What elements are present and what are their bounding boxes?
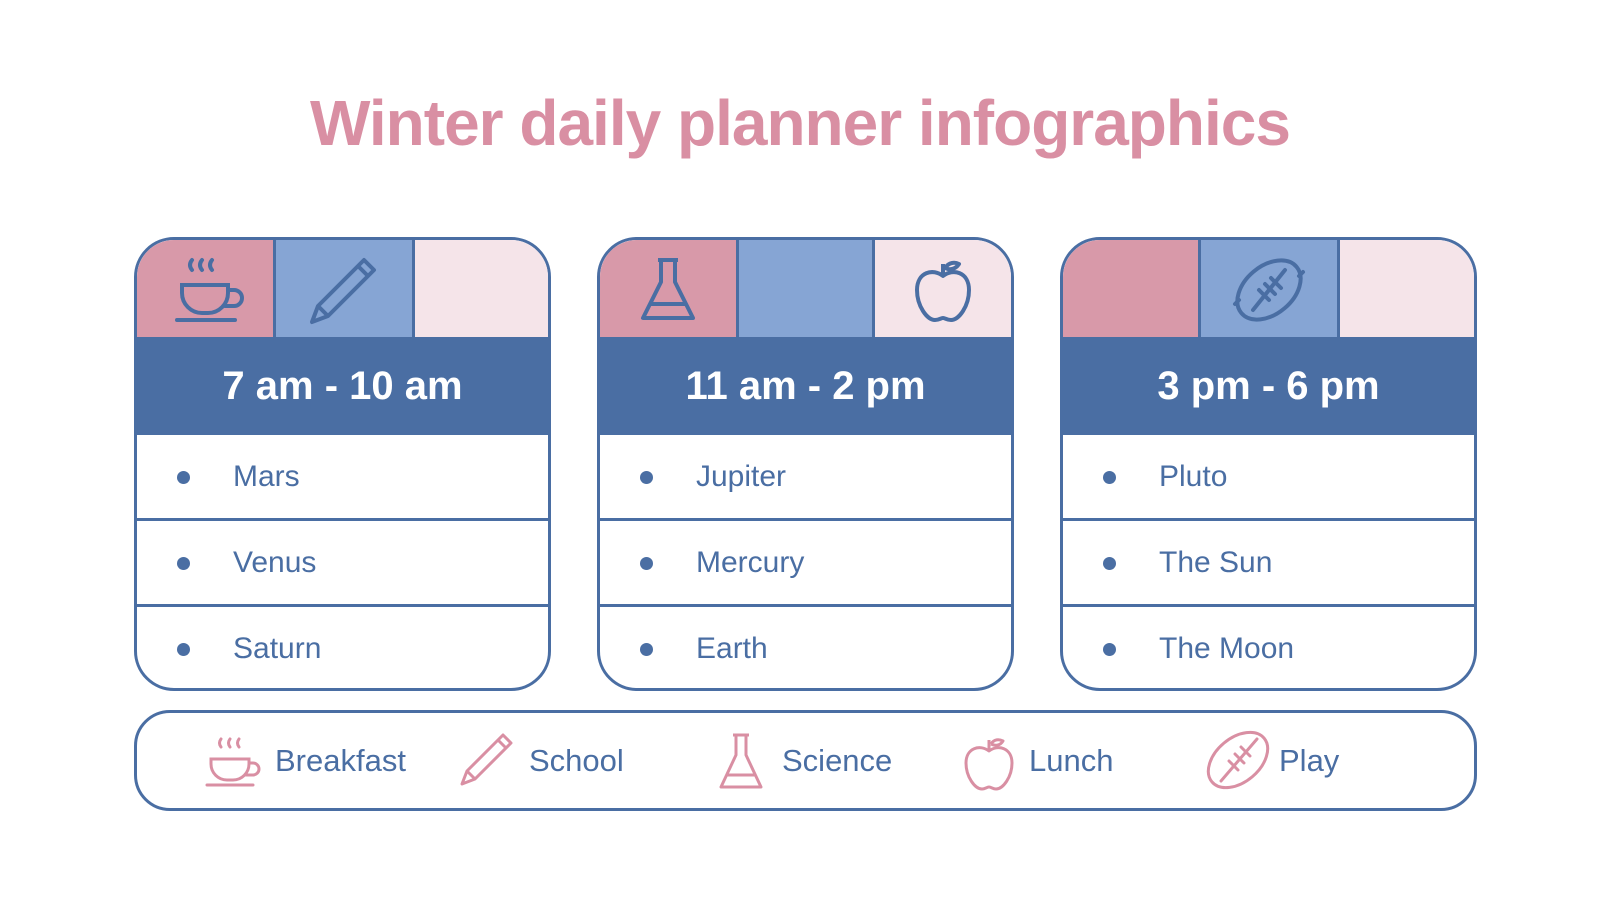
legend: play [1206,730,1340,790]
time band: 11 am - 2 pm [685,364,926,408]
panel: 11 am - 2 pm: Jupiter [696,460,786,493]
panel: 11 am - 2 pm: Mercury [696,546,804,579]
legend: school [460,733,624,786]
legend: breakfast: Breakfast [275,743,406,778]
time band: 3 pm - 6 pm [1157,364,1380,408]
legend: science [720,734,892,788]
legend: science: Science [782,743,892,778]
time band [137,337,548,435]
header icon cells [1063,240,1474,337]
legend [134,710,1477,811]
panel: 3 pm - 6 pm: The Sun [1159,546,1272,579]
legend: school: School [529,743,624,778]
panel: 11 am - 2 pm: Earth [696,632,768,665]
panel: 7 am - 10 am: Mars [233,460,300,493]
time band [600,337,1011,435]
panel: 7 am - 10 am: Saturn [233,632,321,665]
panel: 11 am - 2 pm [597,237,1014,691]
title: Winter daily planner infographics [310,87,1290,159]
legend: lunch [964,738,1113,790]
header icon cells [137,240,548,337]
header icon cells [600,240,1011,337]
panel: 7 am - 10 am: Venus [233,546,316,579]
time band: 7 am - 10 am [222,364,463,408]
legend: play: Play [1279,743,1339,778]
panel: 7 am - 10 am [134,237,551,691]
panel: 3 pm - 6 pm: Pluto [1159,460,1227,493]
time band [1063,337,1474,435]
legend: lunch: Lunch [1029,743,1113,778]
legend: breakfast [206,737,406,786]
panel: 3 pm - 6 pm: The Moon [1159,632,1294,665]
panel: 3 pm - 6 pm [1060,237,1477,691]
